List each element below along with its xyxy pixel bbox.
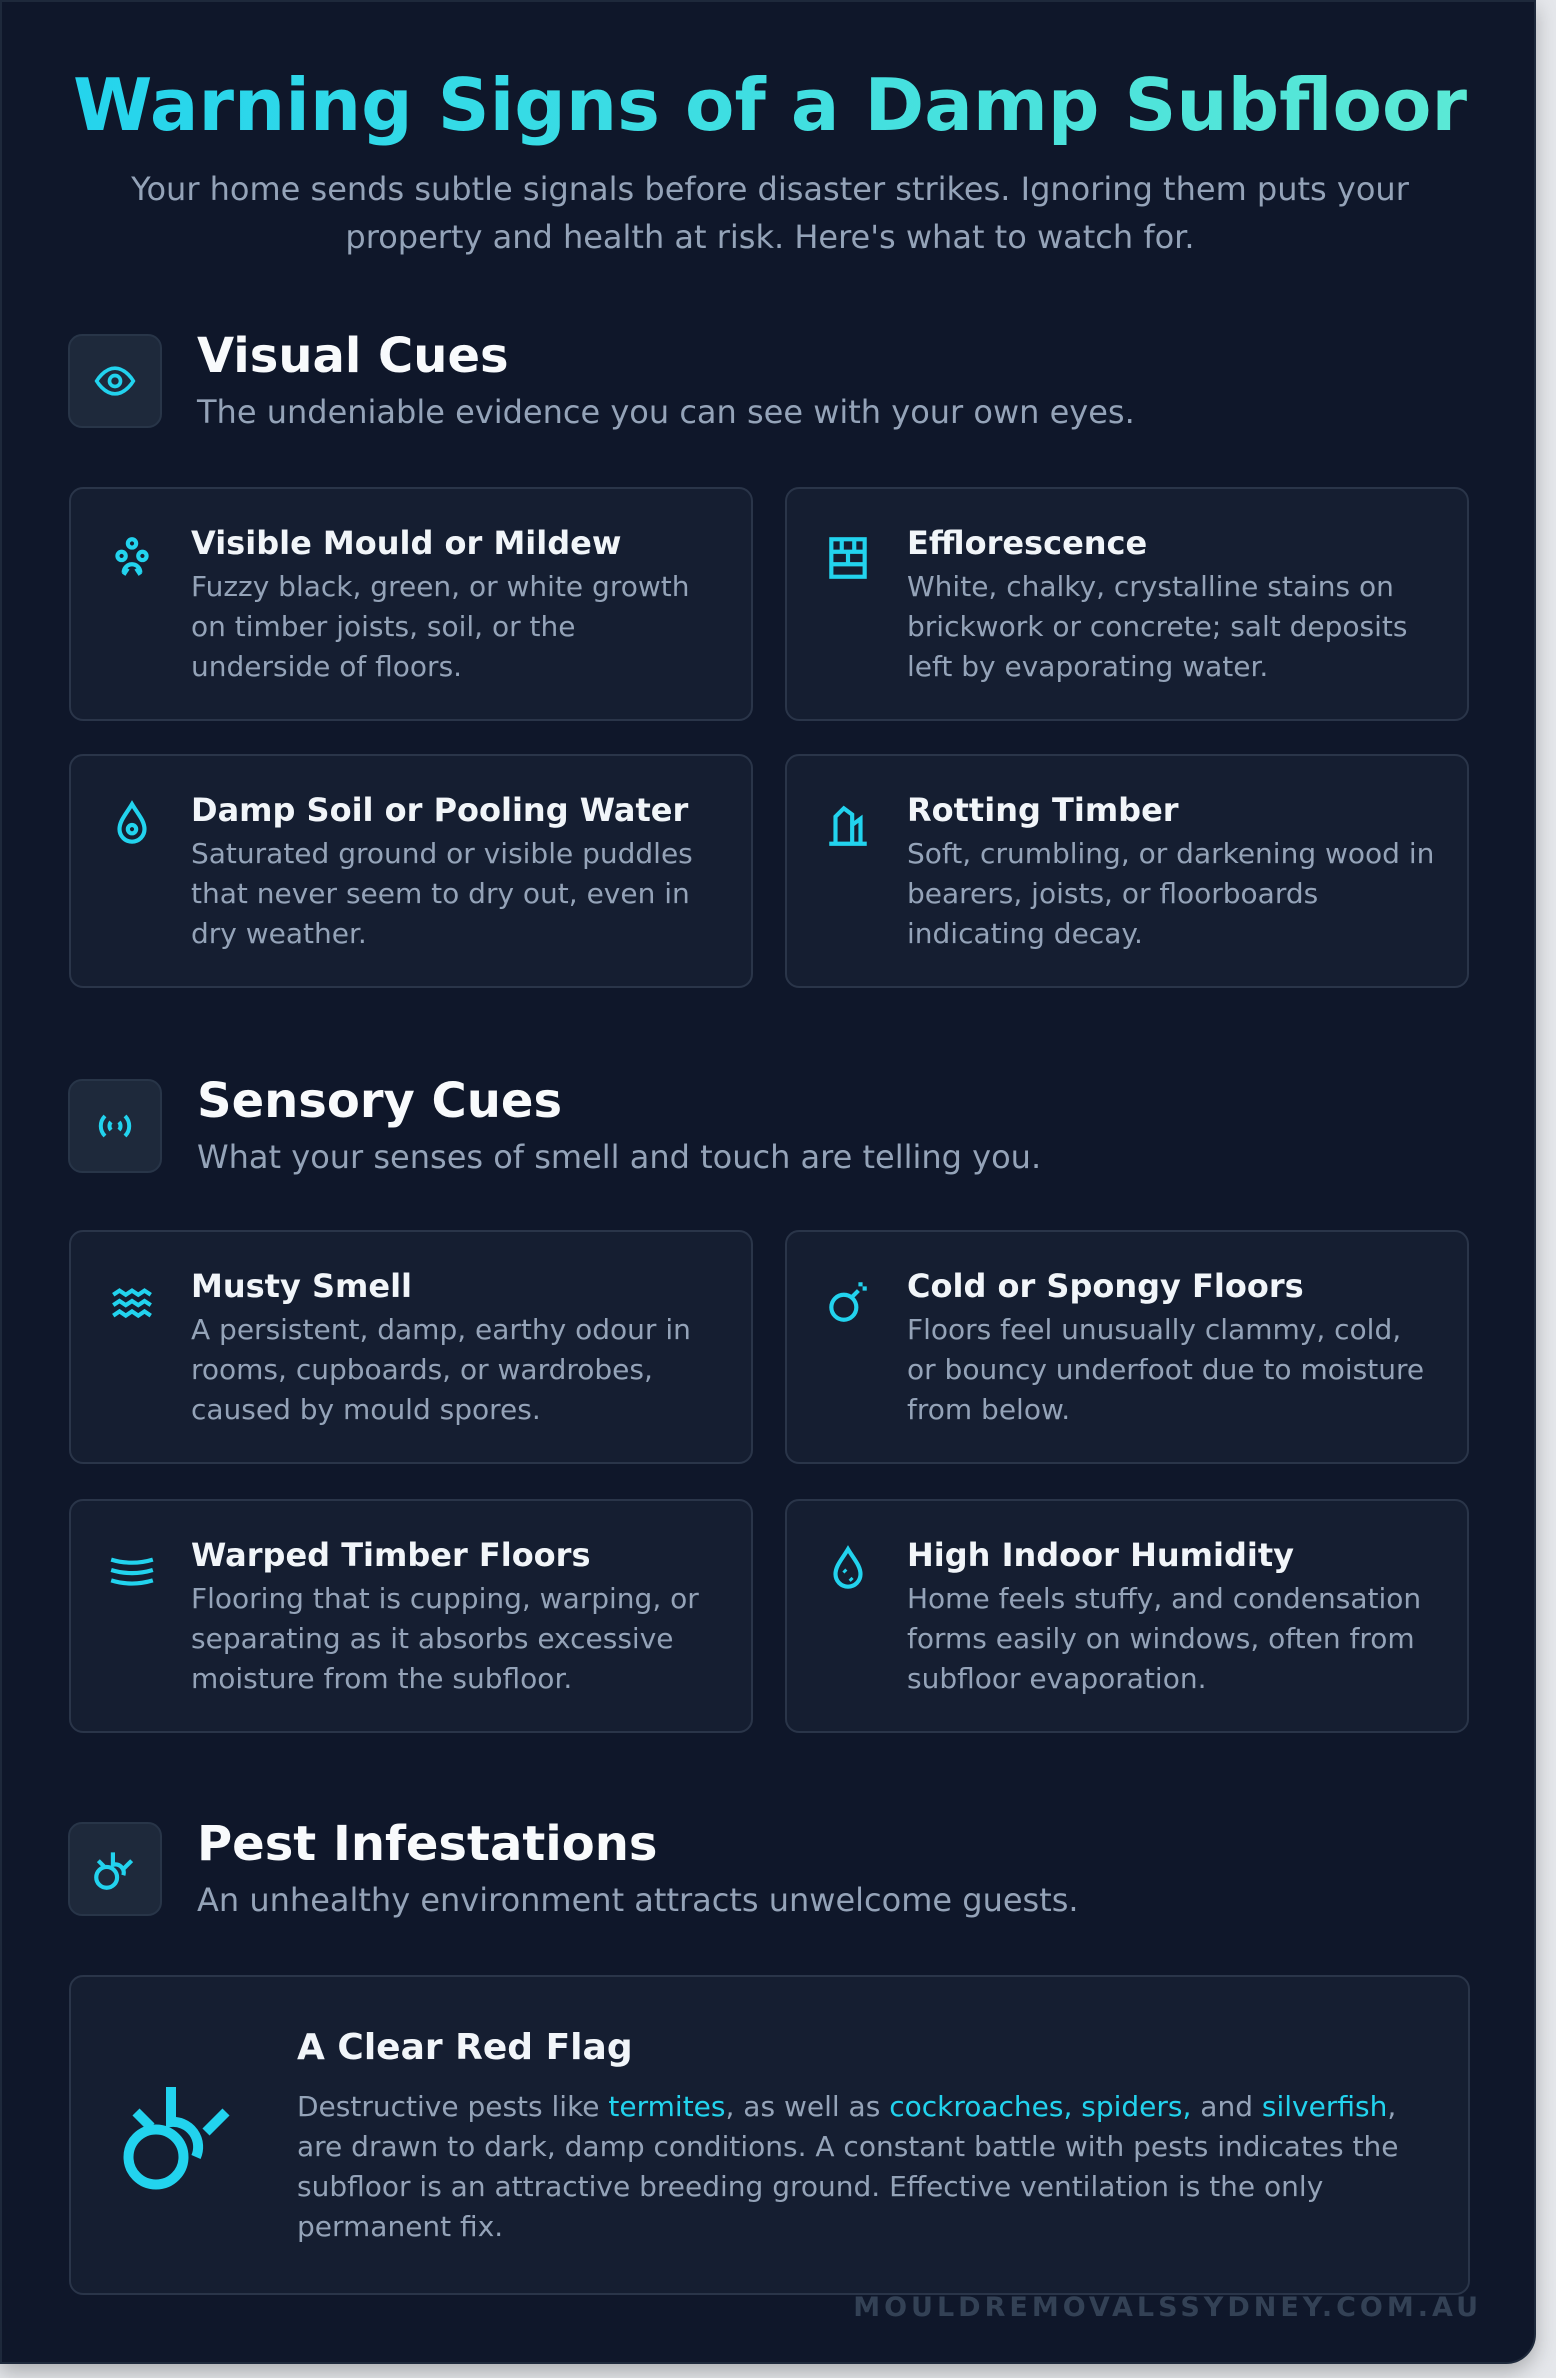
- section heading: pest: An unhealthy environment attracts unwelcome guests.: [197, 1881, 1079, 1919]
- icon: pest: [124, 2087, 230, 2190]
- card: rotting timber: Rotting Timber: [907, 791, 1179, 829]
- card: efflorescence: Efflorescence: [907, 524, 1147, 562]
- card: efflorescence: White, chalky, crystalline stains on brickwork or concrete; salt deposits left by evaporating water.: [907, 570, 1407, 683]
- section heading: pest: [197, 1816, 1079, 1919]
- card: cold floors: Cold or Spongy Floors: [907, 1267, 1304, 1305]
- card: damp soil: Saturated ground or visible puddles that never seem to dry out, even in dry weather.: [191, 837, 693, 950]
- section heading: visual cues: [196, 328, 1135, 431]
- heading: a clear red flag: A Clear Red Flag: [297, 2027, 633, 2068]
- card: humidity: Home feels stuffy, and condensation forms easily on windows, often from subfloor evaporation.: [907, 1582, 1421, 1695]
- section icon: eye: [68, 334, 162, 428]
- card: cold floors: Floors feel unusually clammy, cold, or bouncy underfoot due to moisture from below.: [907, 1313, 1424, 1426]
- footer url: MOULDREMOVALSSYDNEY.COM.AU: [853, 2292, 1482, 2323]
- card: warped floors: [69, 1499, 753, 1733]
- card: damp soil: [69, 754, 753, 988]
- section heading: sensory cues: What your senses of smell and touch are telling you.: [197, 1138, 1041, 1176]
- icon: mould: [115, 537, 149, 576]
- icon: timber: [829, 806, 867, 846]
- card: warped floors: Warped Timber Floors: [191, 1536, 590, 1574]
- icon: warped lines: [110, 1558, 154, 1586]
- icon: bomb: [829, 1282, 867, 1322]
- card: musty smell: Musty Smell: [191, 1267, 412, 1305]
- card: mould: [69, 487, 753, 721]
- section icon: bug: [68, 1822, 162, 1916]
- section heading: visual cues: Visual Cues: [197, 328, 509, 384]
- icon: drop: [117, 800, 147, 844]
- icon: humidity drop: [833, 1545, 863, 1589]
- card: rotting timber: [785, 754, 1469, 988]
- card: humidity: High Indoor Humidity: [907, 1536, 1294, 1574]
- section heading: visual cues: The undeniable evidence you can see with your own eyes.: [197, 393, 1135, 431]
- card: rotting timber: Soft, crumbling, or darkening wood in bearers, joists, or floorboards indicating decay.: [907, 837, 1434, 950]
- card: efflorescence: [785, 487, 1469, 721]
- title: Warning Signs of a Damp Subfloor: [73, 63, 1467, 147]
- panel: red flag: [69, 1975, 1470, 2295]
- card: musty smell: [69, 1230, 753, 1464]
- card: musty smell: A persistent, damp, earthy odour in rooms, cupboards, or wardrobes, caused by mould spores.: [191, 1313, 691, 1426]
- section heading: sensory cues: [197, 1073, 1041, 1176]
- subtitle: Your home sends subtle signals before disaster strikes. Ignoring them puts your property and health at risk. Here's what to watch for.: [131, 170, 1409, 256]
- card: humidity: [785, 1499, 1469, 1733]
- text: pest description: Destructive pests like termites, as well as cockroaches, spiders, and silverfish, are drawn to dark, damp conditions. A constant battle with pests indicates the subfloor is an attractive breeding ground. Effective ventilation is the only permanent fix.: [297, 2090, 1398, 2243]
- section icon: signal: [68, 1079, 162, 1173]
- section heading: pest: Pest Infestations: [197, 1816, 657, 1872]
- card: mould: Fuzzy black, green, or white growth on timber joists, soil, or the underside of floors.: [191, 570, 689, 683]
- card: mould: Visible Mould or Mildew: [191, 524, 621, 562]
- card: warped floors: Flooring that is cupping, warping, or separating as it absorbs excessive moisture from the subfloor.: [191, 1582, 699, 1695]
- card: cold floors: [785, 1230, 1469, 1464]
- icon: waves: [112, 1288, 152, 1318]
- icon: brick wall: [829, 537, 867, 579]
- section heading: sensory cues: Sensory Cues: [197, 1073, 562, 1129]
- card: damp soil: Damp Soil or Pooling Water: [191, 791, 688, 829]
